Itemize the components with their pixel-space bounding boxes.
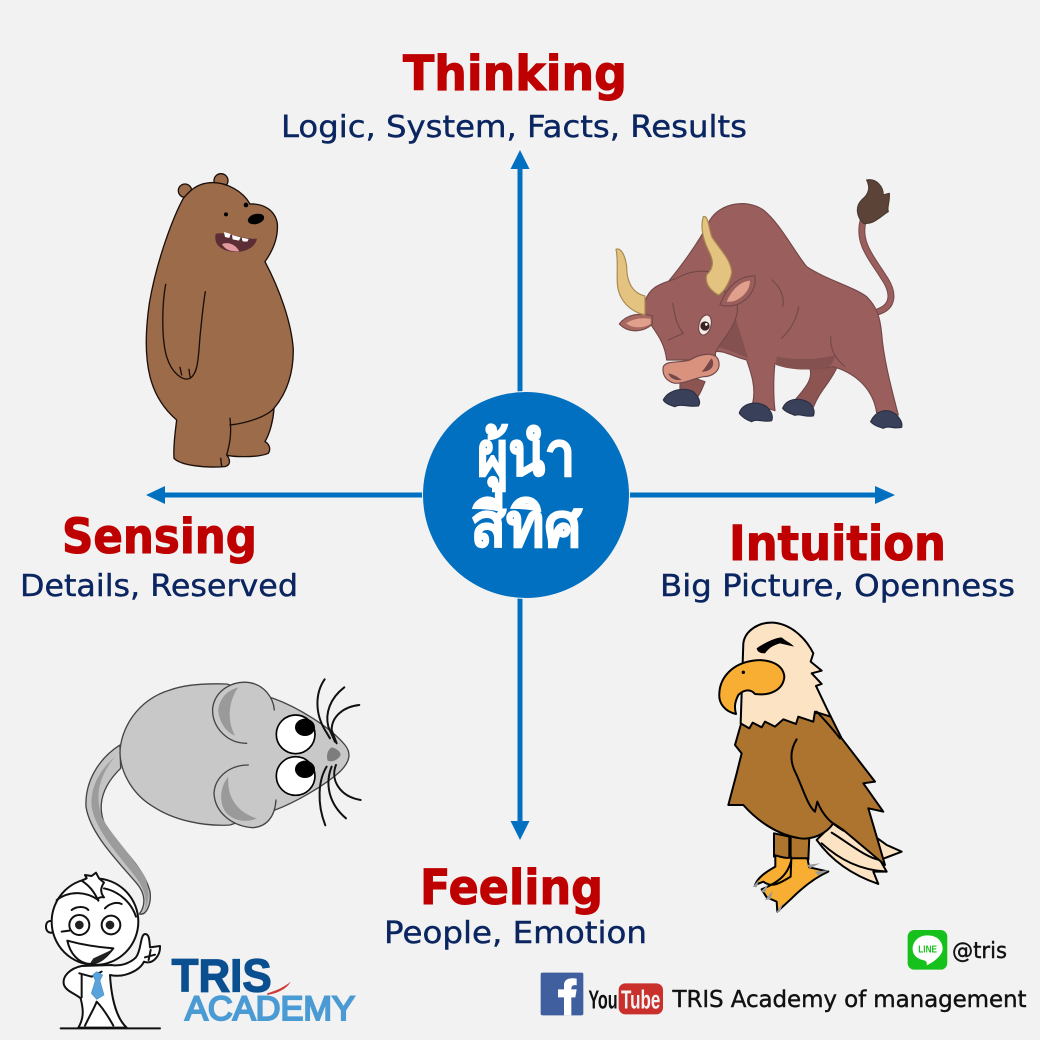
logo: TRIS Academy: TRIS xyxy=(172,950,272,1002)
text: channel name: TRIS Academy of management xyxy=(672,987,1026,1013)
text: LINE handle: @tris xyxy=(952,939,1007,964)
text: Sensing traits: Details, Reserved xyxy=(20,569,298,604)
text: Intuition traits: Big Picture, Openness xyxy=(660,569,1015,604)
icon: bald eagle xyxy=(719,623,902,913)
heading: Intuition: Intuition xyxy=(729,516,946,572)
heading: Thinking: Thinking xyxy=(403,46,627,102)
heading: Sensing: Sensing xyxy=(62,509,257,565)
center circle: four directions leader: ผู้นำ xyxy=(477,421,575,492)
text: Thinking traits: Logic, System, Facts, Results xyxy=(281,110,747,145)
icon: YouTube xyxy=(588,983,663,1015)
logo: TRIS Academy: ACADEMY xyxy=(185,990,355,1028)
icon: brown bear xyxy=(146,174,293,467)
horizontal arrow axis: Sensing to Intuition xyxy=(146,486,895,504)
icon: Facebook xyxy=(541,973,583,1015)
heading: Feeling: Feeling xyxy=(420,860,603,916)
center circle: four directions leader xyxy=(422,391,630,599)
icon: LINE app: LINE xyxy=(918,945,937,956)
icon: YouTube: Tube xyxy=(621,985,660,1015)
text: Feeling traits: People, Emotion xyxy=(384,916,647,951)
icon: grey mouse from above xyxy=(86,679,361,914)
center circle: four directions leader: สี่ทิศ xyxy=(470,483,582,559)
vertical arrow axis: Thinking to Feeling xyxy=(510,150,530,840)
logo: TRIS Academy xyxy=(172,950,355,1028)
icon: charging bull xyxy=(616,180,902,428)
icon: LINE app xyxy=(908,930,947,970)
icon: YouTube: You xyxy=(588,985,618,1015)
icon: cartoon man giving thumbs up xyxy=(46,873,160,1028)
